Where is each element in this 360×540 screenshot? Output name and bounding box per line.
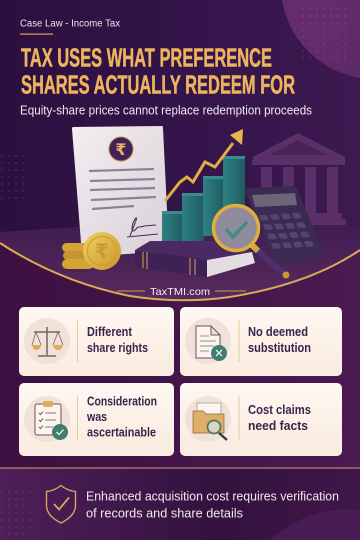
hero table surface	[0, 223, 360, 300]
card: consideration was ascertainable	[19, 383, 174, 456]
card text	[87, 325, 148, 355]
calculator	[245, 186, 324, 265]
rupee coin: ₹	[95, 239, 109, 263]
card text	[86, 394, 157, 440]
magnifying glass	[214, 206, 290, 278]
coin stack	[62, 243, 94, 269]
icon: document with cross	[185, 318, 231, 364]
card text: No deemed	[248, 325, 308, 339]
card text: Different	[87, 325, 133, 339]
footer message: Enhanced acquisition cost requires verification	[86, 488, 339, 504]
brand: TaxTMI.com	[117, 286, 246, 298]
gold arc	[0, 243, 360, 300]
footer message	[86, 488, 339, 520]
rupee seal: ₹	[115, 140, 127, 159]
icon: checklist clipboard	[24, 396, 70, 442]
title	[21, 42, 295, 100]
card: no deemed substitution	[180, 307, 342, 376]
lower background below gold arc	[0, 243, 360, 540]
brand: TaxTMI.com: TaxTMI.com	[150, 286, 210, 298]
footer message: of records and share details	[86, 506, 243, 520]
icon: shield with check	[46, 486, 76, 523]
card text: was	[86, 410, 107, 424]
category label: Case Law - Income Tax	[20, 18, 120, 30]
signature	[127, 218, 158, 237]
card: different share rights	[19, 307, 174, 376]
book	[135, 241, 255, 277]
bar chart	[162, 156, 245, 245]
card text	[248, 403, 311, 433]
rupee coin	[83, 232, 121, 270]
card text: substitution	[248, 341, 311, 355]
subtitle: Equity-share prices cannot replace redemption proceeds	[20, 104, 312, 118]
icon: balance scales	[24, 318, 70, 364]
card text	[248, 325, 311, 355]
card: cost claims need facts	[180, 383, 342, 456]
card text: Consideration	[87, 394, 157, 408]
card text: share rights	[87, 341, 148, 355]
card text: need facts	[248, 419, 308, 433]
calculator keys	[259, 213, 314, 249]
card text: ascertainable	[87, 426, 156, 440]
footer band	[0, 468, 360, 540]
label underline	[20, 34, 53, 35]
card text: Cost claims	[248, 403, 311, 417]
growth arrow	[165, 129, 243, 201]
calculator screen	[252, 193, 297, 207]
icon: bank building	[250, 133, 346, 225]
icon: folder with magnifier	[185, 396, 231, 442]
document with rupee seal	[72, 126, 169, 257]
